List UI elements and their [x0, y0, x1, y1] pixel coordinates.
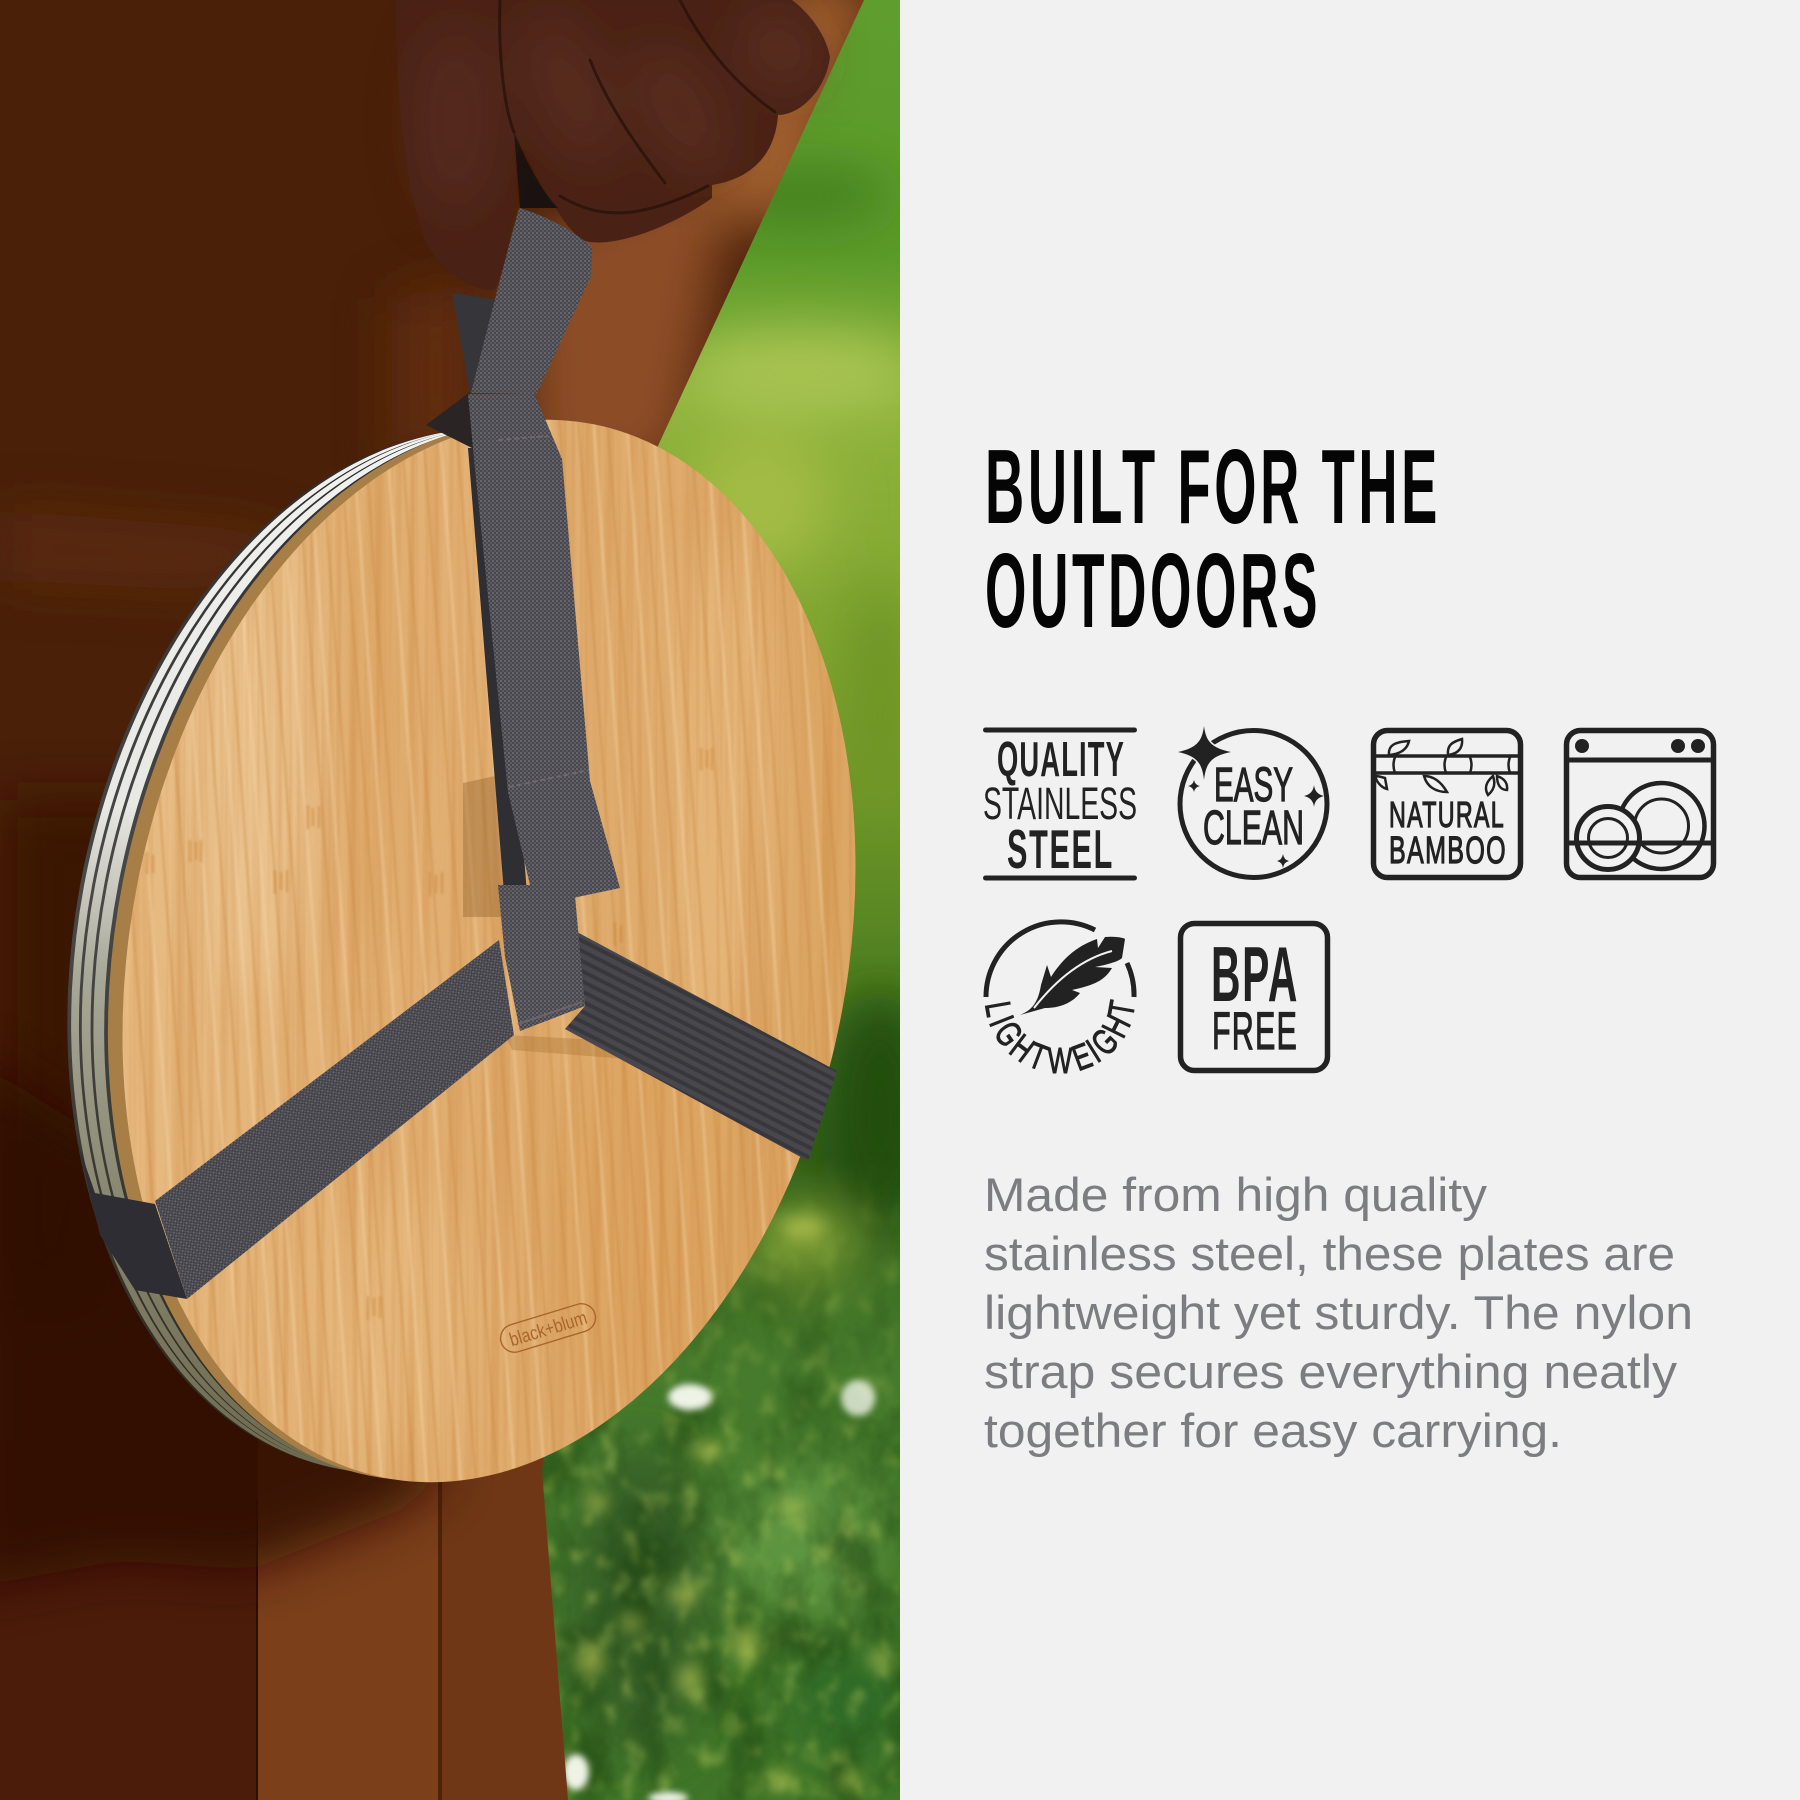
icon: dishwasher safe [1566, 730, 1714, 878]
body text [984, 1168, 1693, 1457]
shadow of plates [0, 1050, 450, 1590]
hand [396, 0, 830, 290]
left arm [155, 940, 514, 1299]
icon: easy clean [1178, 726, 1327, 878]
icon: BPA free: BPA [1211, 930, 1299, 1018]
strap loop front [471, 208, 592, 393]
left arm wrap over steel [77, 1141, 187, 1299]
photo panel: plates being carried outdoors [0, 0, 940, 1800]
icon: quality stainless steel: STAINLESS [983, 778, 1137, 829]
icon: easy clean: CLEAN [1203, 802, 1304, 855]
icon: natural bamboo: NATURAL [1389, 794, 1505, 835]
icon: easy clean: EASY [1214, 759, 1293, 812]
centre patch [498, 885, 585, 1031]
heading: OUTDOORS [985, 532, 1321, 650]
icon: lightweight [977, 922, 1143, 1081]
strap loop back [452, 293, 505, 393]
body text: Made from high quality [984, 1168, 1488, 1221]
engraved logo: black+blum [507, 1308, 590, 1351]
icon: natural bamboo [1373, 730, 1521, 878]
icon: lightweight: I [981, 1010, 1021, 1032]
icon: quality stainless steel [983, 728, 1137, 880]
icon: lightweight: G [1083, 1021, 1126, 1063]
strap shadow on lid [463, 775, 505, 917]
bamboo lid [108, 210, 856, 1482]
icon: quality stainless steel: QUALITY [997, 733, 1125, 787]
body text: together for easy carrying. [984, 1404, 1562, 1457]
heading [985, 428, 1441, 650]
body text: strap secures everything neatly [984, 1345, 1678, 1398]
yellow flower specks [576, 1215, 892, 1790]
lower trouser legs [258, 1472, 438, 1800]
icon: BPA free: FREE [1212, 1002, 1298, 1061]
body text: stainless steel, these plates are [984, 1227, 1675, 1280]
right arm [565, 932, 837, 1161]
icon: lightweight: L [977, 998, 1019, 1020]
wood grain lines [132, 420, 844, 1482]
steel plate stack [67, 432, 447, 1472]
icon: lightweight: H [1003, 1027, 1042, 1070]
icon: lightweight: G [986, 1014, 1031, 1054]
trousers [0, 0, 900, 1800]
icon: lightweight: H [1094, 1009, 1139, 1043]
body text: lightweight yet sturdy. The nylon [984, 1286, 1693, 1339]
icon: natural bamboo: BAMBOO [1389, 830, 1507, 872]
icon: quality stainless steel: STEEL [1007, 818, 1114, 880]
icon: lightweight: E [1067, 1035, 1097, 1079]
grass background [542, 0, 900, 1800]
icon: lightweight: I [1080, 1032, 1107, 1070]
icon: lightweight: W [1048, 1041, 1073, 1081]
icon: lightweight: T [1101, 998, 1143, 1020]
icon: lightweight: T [1023, 1035, 1052, 1078]
icon: BPA free [1180, 924, 1328, 1070]
bamboo nodes [147, 748, 712, 1320]
right text panel background [900, 0, 1800, 1800]
nylon strap [77, 208, 837, 1299]
main hanging strap [468, 393, 620, 906]
strap rear layer [426, 392, 476, 450]
white flowers [563, 1380, 875, 1800]
